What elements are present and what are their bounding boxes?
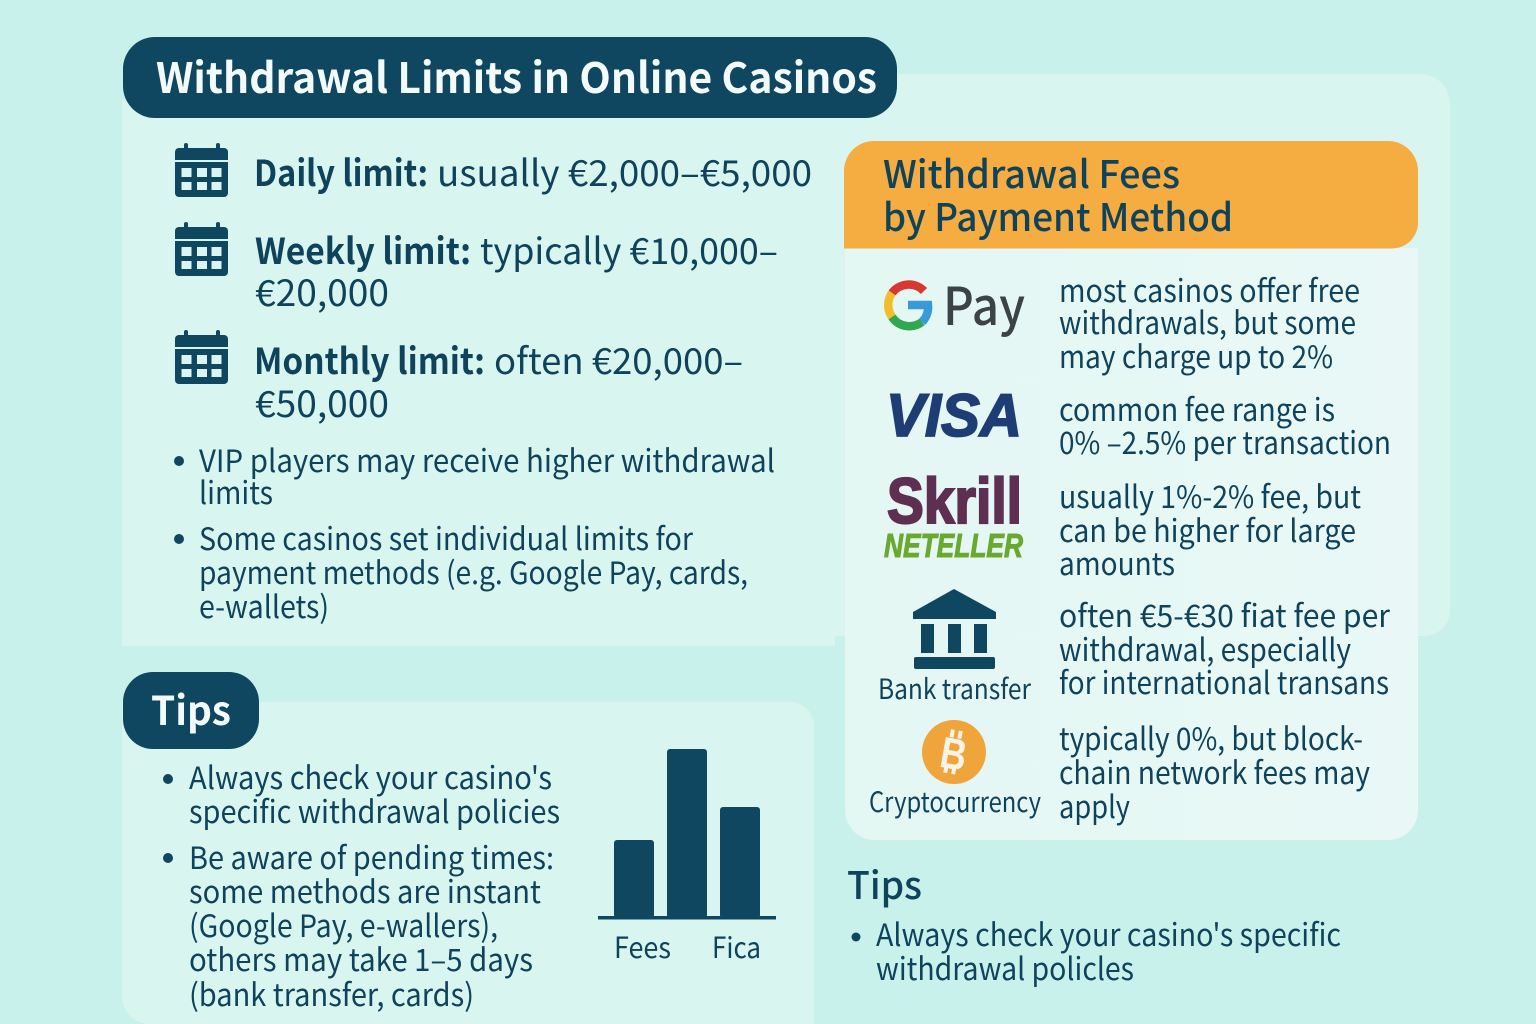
label: bank transfer: Bank transfer xyxy=(878,668,1031,708)
tip: pending times xyxy=(163,833,554,1015)
fee: Google Pay: withdrawals, but some xyxy=(1059,298,1356,343)
icon: Google Pay logo xyxy=(888,265,1025,340)
tip: right: withdrawal policles xyxy=(876,944,1134,989)
tip: pending times: some methods are instant xyxy=(189,867,541,912)
fee: Skrill and Neteller xyxy=(1059,472,1361,584)
fee: Skrill and Neteller: amounts xyxy=(1059,539,1175,584)
tip: check policies: specific withdrawal policies xyxy=(189,787,560,832)
limit: monthly: often €20,000– xyxy=(494,333,743,385)
fee: Visa: common fee range is xyxy=(1059,385,1335,430)
panel: tips left xyxy=(122,702,814,1024)
panel: withdrawal fees card xyxy=(845,248,1418,840)
icon: Skrill and Neteller logos: Skrill xyxy=(887,465,1022,537)
icon: calendar monthly xyxy=(175,330,228,384)
tips heading xyxy=(123,672,259,749)
tip: check policies: Always check your casino's xyxy=(189,753,552,798)
fee: Google Pay: may charge up to 2% xyxy=(1059,332,1333,377)
bullet: VIP players xyxy=(174,436,775,513)
icon: calendar weekly xyxy=(175,222,228,276)
icon: bank xyxy=(913,589,996,669)
limit: weekly: €20,000 xyxy=(255,265,389,317)
limit: monthly xyxy=(175,330,743,428)
panel: withdrawal limits xyxy=(122,100,1450,646)
tip: pending times: (bank transfer, cards) xyxy=(189,970,474,1015)
bar chart xyxy=(598,749,776,967)
limit: monthly: €50,000 xyxy=(255,376,389,428)
tip: right xyxy=(852,910,1341,989)
limit: daily: usually €2,000–€5,000 xyxy=(437,145,812,197)
tip: pending times: Be aware of pending times: xyxy=(189,833,554,878)
tip: pending times: (Google Pay, e-wallers), xyxy=(189,901,498,946)
tips heading: Tips xyxy=(151,679,231,737)
fee: bank transfer: often €5-€30 fiat fee per xyxy=(1059,591,1391,636)
fee: Visa xyxy=(1059,385,1391,463)
fee: Visa: 0% –2.5% per transaction xyxy=(1059,418,1391,463)
icon: Visa logo: VISA xyxy=(886,382,1022,449)
icon: Skrill and Neteller logos: NETELLER xyxy=(884,527,1023,564)
bullet: VIP players: limits xyxy=(199,468,273,513)
icon: Skrill and Neteller logos xyxy=(884,465,1023,564)
bullet: VIP players: VIP players may receive higher withdrawal xyxy=(199,436,775,481)
fee: cryptocurrency: typically 0%, but block- xyxy=(1059,714,1363,759)
fees header: by Payment Method xyxy=(883,187,1233,242)
limit: weekly xyxy=(175,222,778,317)
tips heading right: Tips xyxy=(847,855,922,910)
bullet: individual limits: e-wallets) xyxy=(199,582,329,627)
limit: weekly: typically €10,000– xyxy=(480,223,778,275)
icon: bitcoin xyxy=(922,720,986,784)
fee: bank transfer: for international transans xyxy=(1059,658,1389,703)
label: cryptocurrency: Cryptocurrency xyxy=(869,781,1041,821)
tip: pending times: others may take 1–5 days xyxy=(189,935,533,980)
icon: bitcoin: B xyxy=(937,728,971,781)
bullet: individual limits: Some casinos set individual limits for xyxy=(199,514,694,559)
fees header: Withdrawal Fees xyxy=(883,144,1180,199)
tip: right: Always check your casino's specific xyxy=(876,910,1341,955)
fees header xyxy=(844,141,1418,248)
fee: cryptocurrency: apply xyxy=(1059,782,1130,827)
fee: cryptocurrency: chain network fees may xyxy=(1059,748,1370,793)
bullet: individual limits: payment methods (e.g. Google Pay, cards, xyxy=(199,548,748,593)
fee: Google Pay xyxy=(1059,266,1360,377)
limit: daily xyxy=(175,143,812,197)
fee: Google Pay: most casinos offer free xyxy=(1059,266,1360,311)
fee: bank transfer xyxy=(1059,591,1391,703)
fee: cryptocurrency xyxy=(1059,714,1370,827)
bar chart: Fees xyxy=(614,925,671,967)
tip: check policies xyxy=(163,753,560,832)
limit: monthly: Monthly limit: xyxy=(254,333,485,385)
icon: calendar daily xyxy=(175,143,228,197)
limit: daily: Daily limit: xyxy=(254,145,428,197)
bullet: individual limits xyxy=(174,514,748,627)
icon: Google Pay logo: Pay xyxy=(943,265,1025,340)
fee: Skrill and Neteller: can be higher for large xyxy=(1059,506,1356,551)
fee: bank transfer: withdrawal, especially xyxy=(1059,625,1351,670)
title bar xyxy=(123,37,897,118)
limit: weekly: Weekly limit: xyxy=(255,223,471,275)
title: Withdrawal Limits in Online Casinos xyxy=(156,45,877,106)
fee: Skrill and Neteller: usually 1%-2% fee, but xyxy=(1059,472,1361,517)
bar chart: Fica xyxy=(712,925,761,967)
